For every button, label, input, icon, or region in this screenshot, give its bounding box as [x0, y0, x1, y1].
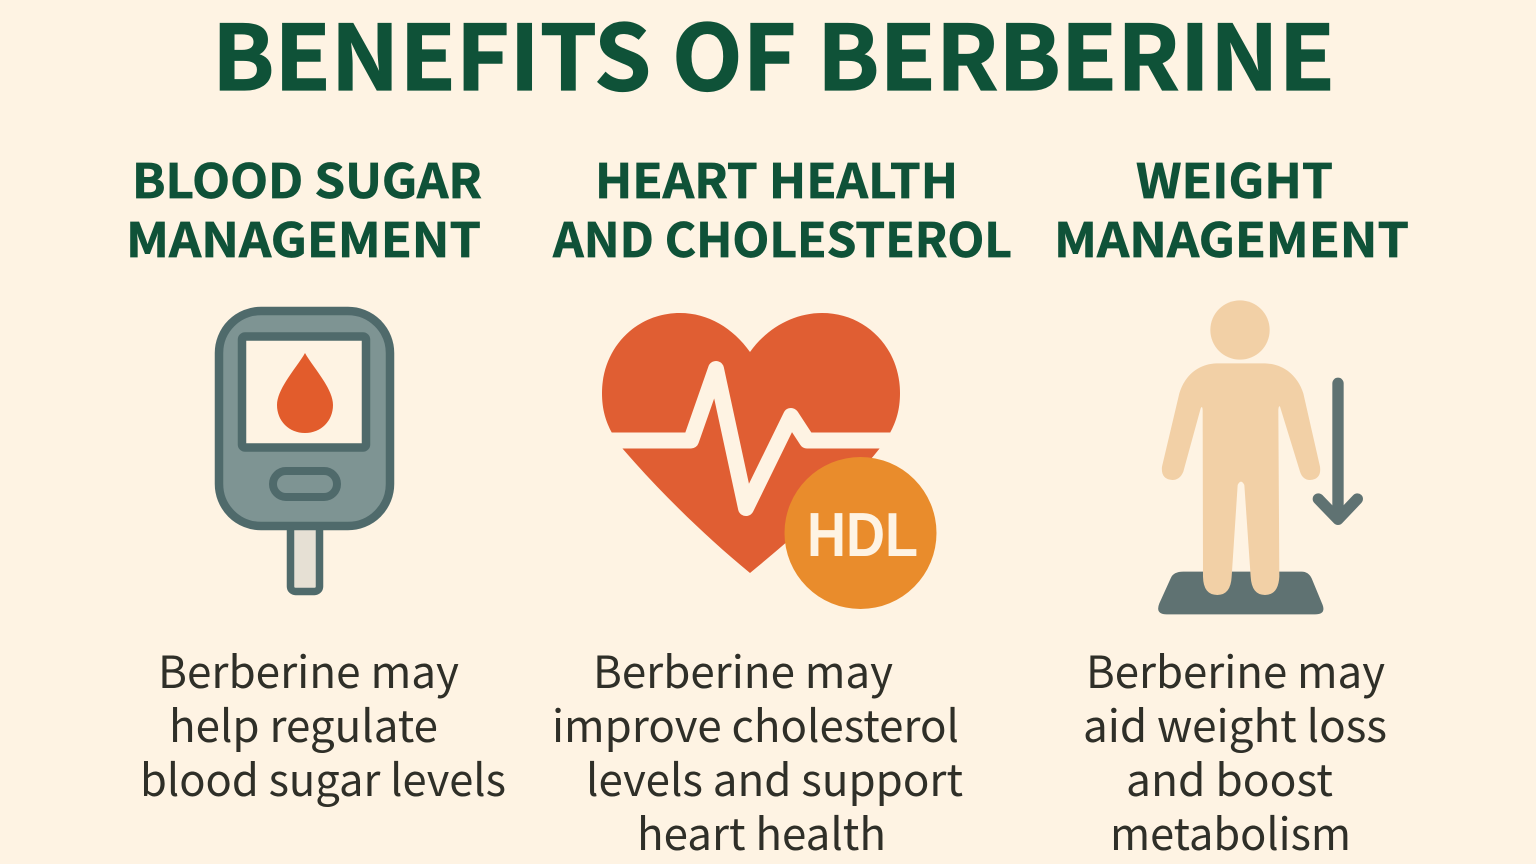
panel: weight management: [1054, 143, 1409, 863]
text: weight management description: metabolism: [1110, 799, 1351, 863]
heading: weight management: WEIGHT: [1136, 143, 1333, 212]
meter screen: [242, 336, 366, 448]
panel: heart health and cholesterol: [552, 143, 1012, 863]
meter button: [273, 471, 337, 497]
text: heart health description: improve cholesterol: [552, 691, 959, 755]
heading: heart health and cholesterol: AND CHOLESTEROL: [552, 202, 1012, 271]
HDL badge: [784, 457, 936, 609]
heart: [602, 313, 900, 573]
test strip: [290, 520, 320, 592]
scale platform: [1158, 572, 1323, 614]
icon: heart with pulse and HDL badge: [596, 313, 936, 609]
text: heart health description: heart health: [637, 799, 886, 863]
text: blood sugar description: [140, 637, 506, 809]
meter body: [219, 311, 390, 526]
heading: heart health and cholesterol: HEART HEALTH: [595, 143, 958, 212]
text: blood sugar description: Berberine may: [158, 637, 459, 701]
HDL badge: HDL: [807, 501, 918, 570]
text: weight management description: [1083, 637, 1387, 863]
heading: blood sugar management: MANAGEMENT: [126, 202, 481, 271]
heading: heart health and cholesterol: [552, 143, 1012, 271]
text: weight management description: Berberine may: [1086, 637, 1385, 701]
person figure: [1162, 300, 1320, 595]
text: heart health description: [552, 637, 963, 863]
icon: glucose meter: [219, 311, 390, 592]
heading: weight management: [1054, 143, 1409, 271]
icon: blood drop: [277, 353, 333, 433]
arrow: down: [1318, 383, 1357, 519]
panel: blood sugar management: [126, 143, 506, 809]
text: heart health description: levels and support: [586, 745, 963, 809]
icon: person on scale with down arrow: [1158, 300, 1357, 614]
pulse line: [596, 369, 905, 508]
heading: blood sugar management: BLOOD SUGAR: [132, 143, 482, 212]
text: weight management description: aid weight loss: [1083, 691, 1387, 755]
text: blood sugar description: help regulate: [169, 691, 438, 755]
text: blood sugar description: blood sugar levels: [140, 745, 506, 809]
text: heart health description: Berberine may: [593, 637, 893, 701]
heading: weight management: MANAGEMENT: [1054, 202, 1409, 271]
heading: blood sugar management: [126, 143, 482, 271]
text: weight management description: and boost: [1126, 745, 1333, 809]
